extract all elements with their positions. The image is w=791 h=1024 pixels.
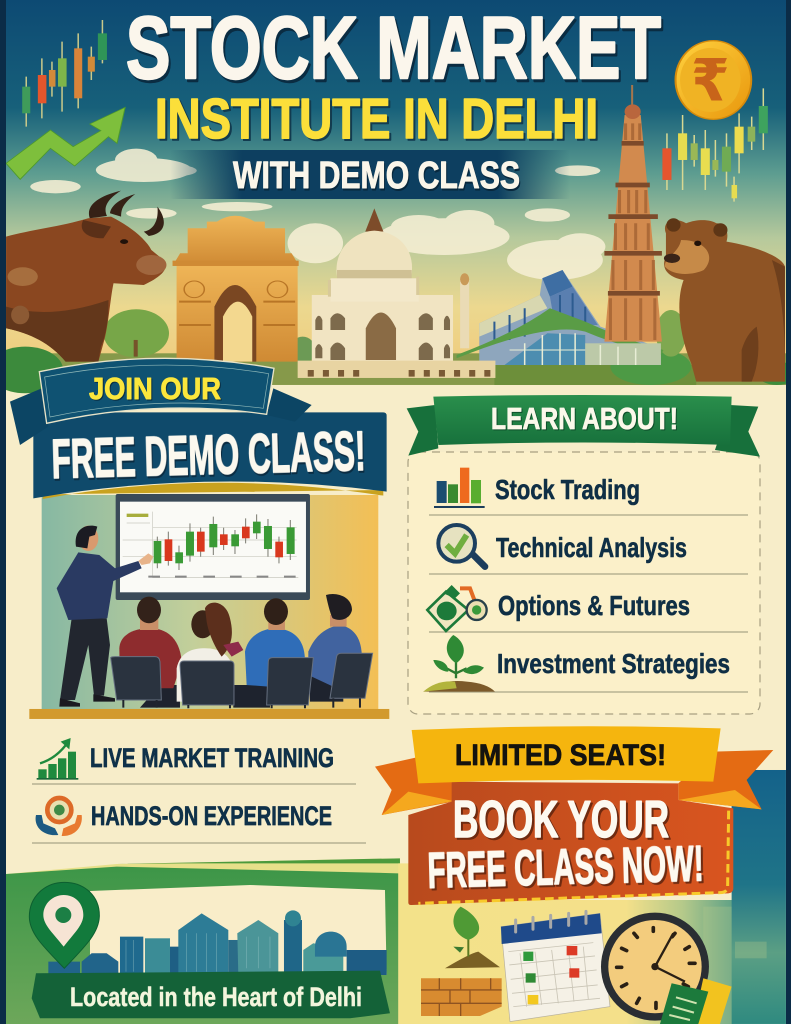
candlestick chart right	[662, 88, 768, 202]
ribbon: learn about	[407, 395, 760, 457]
city skyline	[48, 910, 387, 975]
panel: free demo class scene	[29, 494, 389, 719]
heading: limited seats: LIMITED SEATS!	[455, 739, 666, 772]
presenter	[57, 526, 153, 707]
icon: location pin	[29, 882, 99, 968]
ribbon join our	[39, 358, 274, 423]
icon: options and futures	[427, 585, 487, 631]
arrow: green upward	[6, 107, 125, 179]
icon: rising bars	[37, 738, 78, 780]
landmark: ground greenery	[0, 309, 791, 393]
scene: desk backdrop	[398, 863, 733, 1024]
panel: teal right backdrop	[732, 770, 786, 1024]
icon: plant sprout	[423, 635, 495, 692]
text: options and futures: Options & Futures	[498, 590, 690, 621]
panel: orange call to action	[408, 782, 733, 905]
title: institute in Delhi: INSTITUTE IN DELHI	[155, 87, 598, 151]
landmark: Taj Mahal	[312, 208, 469, 362]
landmark: glass institute building	[457, 270, 663, 365]
text: technical analysis: Technical Analysis	[496, 532, 687, 563]
panel: book now	[375, 726, 786, 1024]
icon: hands with gear	[36, 798, 82, 836]
heading: join our: JOIN OUR	[89, 371, 221, 406]
heading band: with demo class	[170, 150, 570, 199]
heading: free demo class: FREE DEMO CLASS!	[51, 419, 366, 490]
list: benefits	[32, 738, 366, 843]
animal: bull	[6, 191, 166, 362]
icon: calendar	[501, 911, 610, 1022]
heading: learn about: LEARN ABOUT!	[491, 401, 678, 436]
text: located in the heart of Delhi: Located in the Heart of Delhi	[70, 982, 362, 1012]
banner: located	[32, 971, 390, 1018]
text: investment strategies: Investment Strategies	[497, 648, 730, 679]
icon: magnifier with check	[438, 525, 485, 567]
panel: learn about	[407, 395, 760, 714]
icon: rupee coin	[676, 41, 751, 119]
candlestick chart left	[22, 20, 107, 127]
landmark: terrace	[298, 361, 495, 378]
plant on bricks	[421, 907, 502, 1016]
icon: bar chart	[434, 468, 485, 508]
ribbon tails	[10, 388, 312, 445]
audience	[111, 594, 373, 708]
landmark: Qutub Minar	[604, 85, 662, 342]
heading: book your: BOOK YOUR	[453, 791, 669, 849]
floor shelf	[29, 709, 389, 719]
text: live market training: LIVE MARKET TRAINING	[90, 743, 334, 773]
text: stock trading: Stock Trading	[495, 474, 640, 505]
icon: rupee coin: ₹	[691, 47, 730, 115]
icon: clock	[601, 913, 709, 1021]
panel: hero scene	[0, 0, 791, 393]
banner: free demo class	[10, 358, 387, 499]
dividers	[429, 515, 748, 692]
ribbon limited seats	[412, 726, 721, 783]
title: with demo class: WITH DEMO CLASS	[233, 155, 520, 197]
landmark: India Gate	[173, 216, 299, 362]
dashed list frame	[408, 452, 760, 714]
ribbon tails	[375, 750, 773, 815]
clouds	[30, 149, 605, 280]
icon: books	[660, 978, 732, 1024]
animal: bear	[664, 218, 785, 382]
presentation screen with candlestick chart	[116, 494, 310, 600]
panel: location	[6, 858, 400, 1024]
text: hands-on experience: HANDS-ON EXPERIENCE	[91, 801, 332, 831]
